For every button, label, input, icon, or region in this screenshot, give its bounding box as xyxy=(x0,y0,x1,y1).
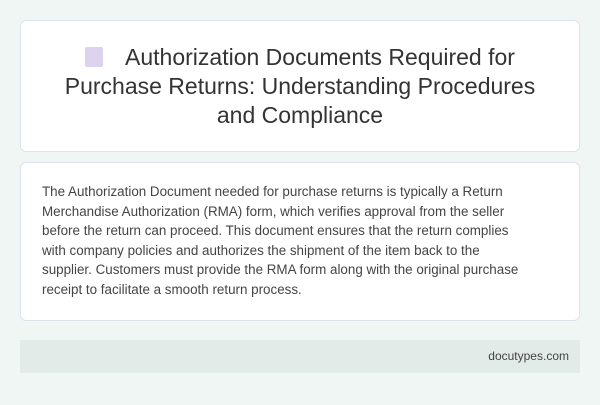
text block: receipt to facilitate a smooth return process. xyxy=(42,282,302,297)
footer xyxy=(20,340,580,373)
text block: supplier. Customers must provide the RMA form along with the original purchase xyxy=(42,262,518,277)
text block: Merchandise Authorization (RMA) form, which verifies approval from the seller xyxy=(42,204,504,219)
title xyxy=(65,44,535,128)
title: Authorization Documents Required for xyxy=(125,44,515,70)
title: and Compliance xyxy=(217,102,383,128)
text block: before the return can proceed. This document ensures that the return complies xyxy=(42,223,508,238)
panel: description xyxy=(20,162,580,321)
text block: The Authorization Document needed for purchase returns is typically a Return xyxy=(42,184,503,199)
footer: docutypes.com xyxy=(488,349,569,363)
text block: with company policies and authorizes the shipment of the item back to the xyxy=(42,243,480,258)
text block xyxy=(42,184,518,297)
panel: title xyxy=(20,20,580,152)
title: Purchase Returns: Understanding Procedures xyxy=(65,73,535,99)
